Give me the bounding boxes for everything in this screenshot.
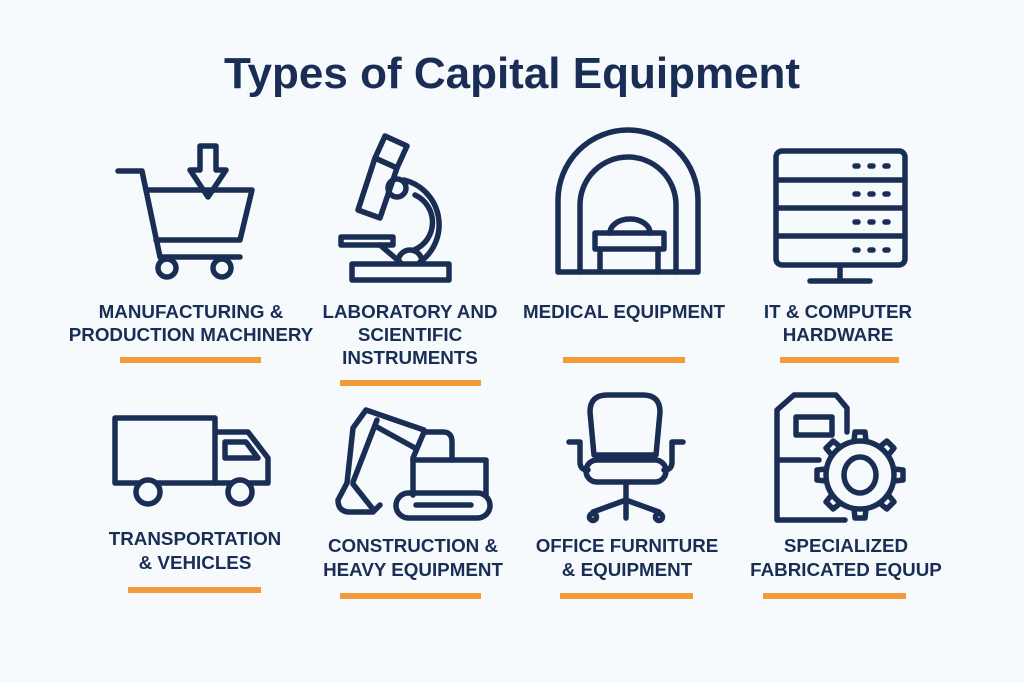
label: construction: CONSTRUCTION &	[328, 535, 498, 556]
label: manufacturing: PRODUCTION MACHINERY	[69, 324, 314, 345]
label: IT: HARDWARE	[783, 324, 893, 345]
label: transport: TRANSPORTATION	[109, 528, 281, 549]
label: specialized: FABRICATED EQUUP	[750, 559, 942, 580]
title: Types of Capital Equipment	[224, 49, 800, 98]
label: construction: HEAVY EQUIPMENT	[323, 559, 503, 580]
icon: shopping cart	[118, 146, 252, 277]
icon: excavator	[338, 410, 490, 518]
label: IT	[764, 301, 913, 363]
label: IT: IT & COMPUTER	[764, 301, 913, 322]
label: manufacturing	[69, 301, 314, 363]
label: office: & EQUIPMENT	[562, 559, 693, 580]
label: laboratory	[323, 301, 497, 386]
label: specialized	[750, 535, 942, 599]
icon: fabricated part with gear	[777, 395, 903, 520]
label: laboratory: LABORATORY AND	[323, 301, 497, 322]
label: transport	[109, 528, 281, 593]
label: medical: MEDICAL EQUIPMENT	[523, 301, 726, 322]
icon: server	[776, 151, 905, 281]
label: manufacturing: MANUFACTURING &	[99, 301, 283, 322]
label: specialized: SPECIALIZED	[784, 535, 908, 556]
label: medical	[523, 301, 726, 363]
icon: microscope	[341, 136, 449, 280]
icon: office chair	[569, 395, 683, 520]
label: construction	[323, 535, 503, 599]
icon: truck	[115, 418, 268, 504]
label: office	[536, 535, 718, 599]
label: laboratory: SCIENTIFIC	[358, 324, 463, 345]
label: laboratory: INSTRUMENTS	[342, 347, 478, 368]
label: transport: & VEHICLES	[139, 552, 251, 573]
icon: MRI scanner	[558, 130, 698, 272]
label: office: OFFICE FURNITURE	[536, 535, 718, 556]
